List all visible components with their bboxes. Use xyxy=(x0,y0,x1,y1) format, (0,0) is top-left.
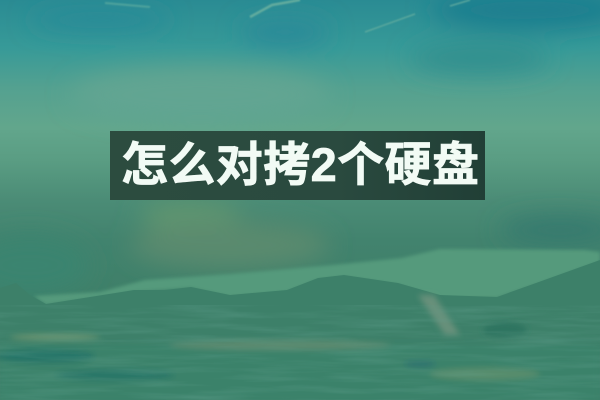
foreground hills xyxy=(0,295,600,400)
title panel xyxy=(110,131,485,200)
foreground streak texture xyxy=(0,305,600,400)
title: 怎么对拷2个硬盘 xyxy=(121,138,479,191)
clouds xyxy=(105,0,470,32)
lake xyxy=(34,249,600,305)
mountains xyxy=(0,260,600,400)
